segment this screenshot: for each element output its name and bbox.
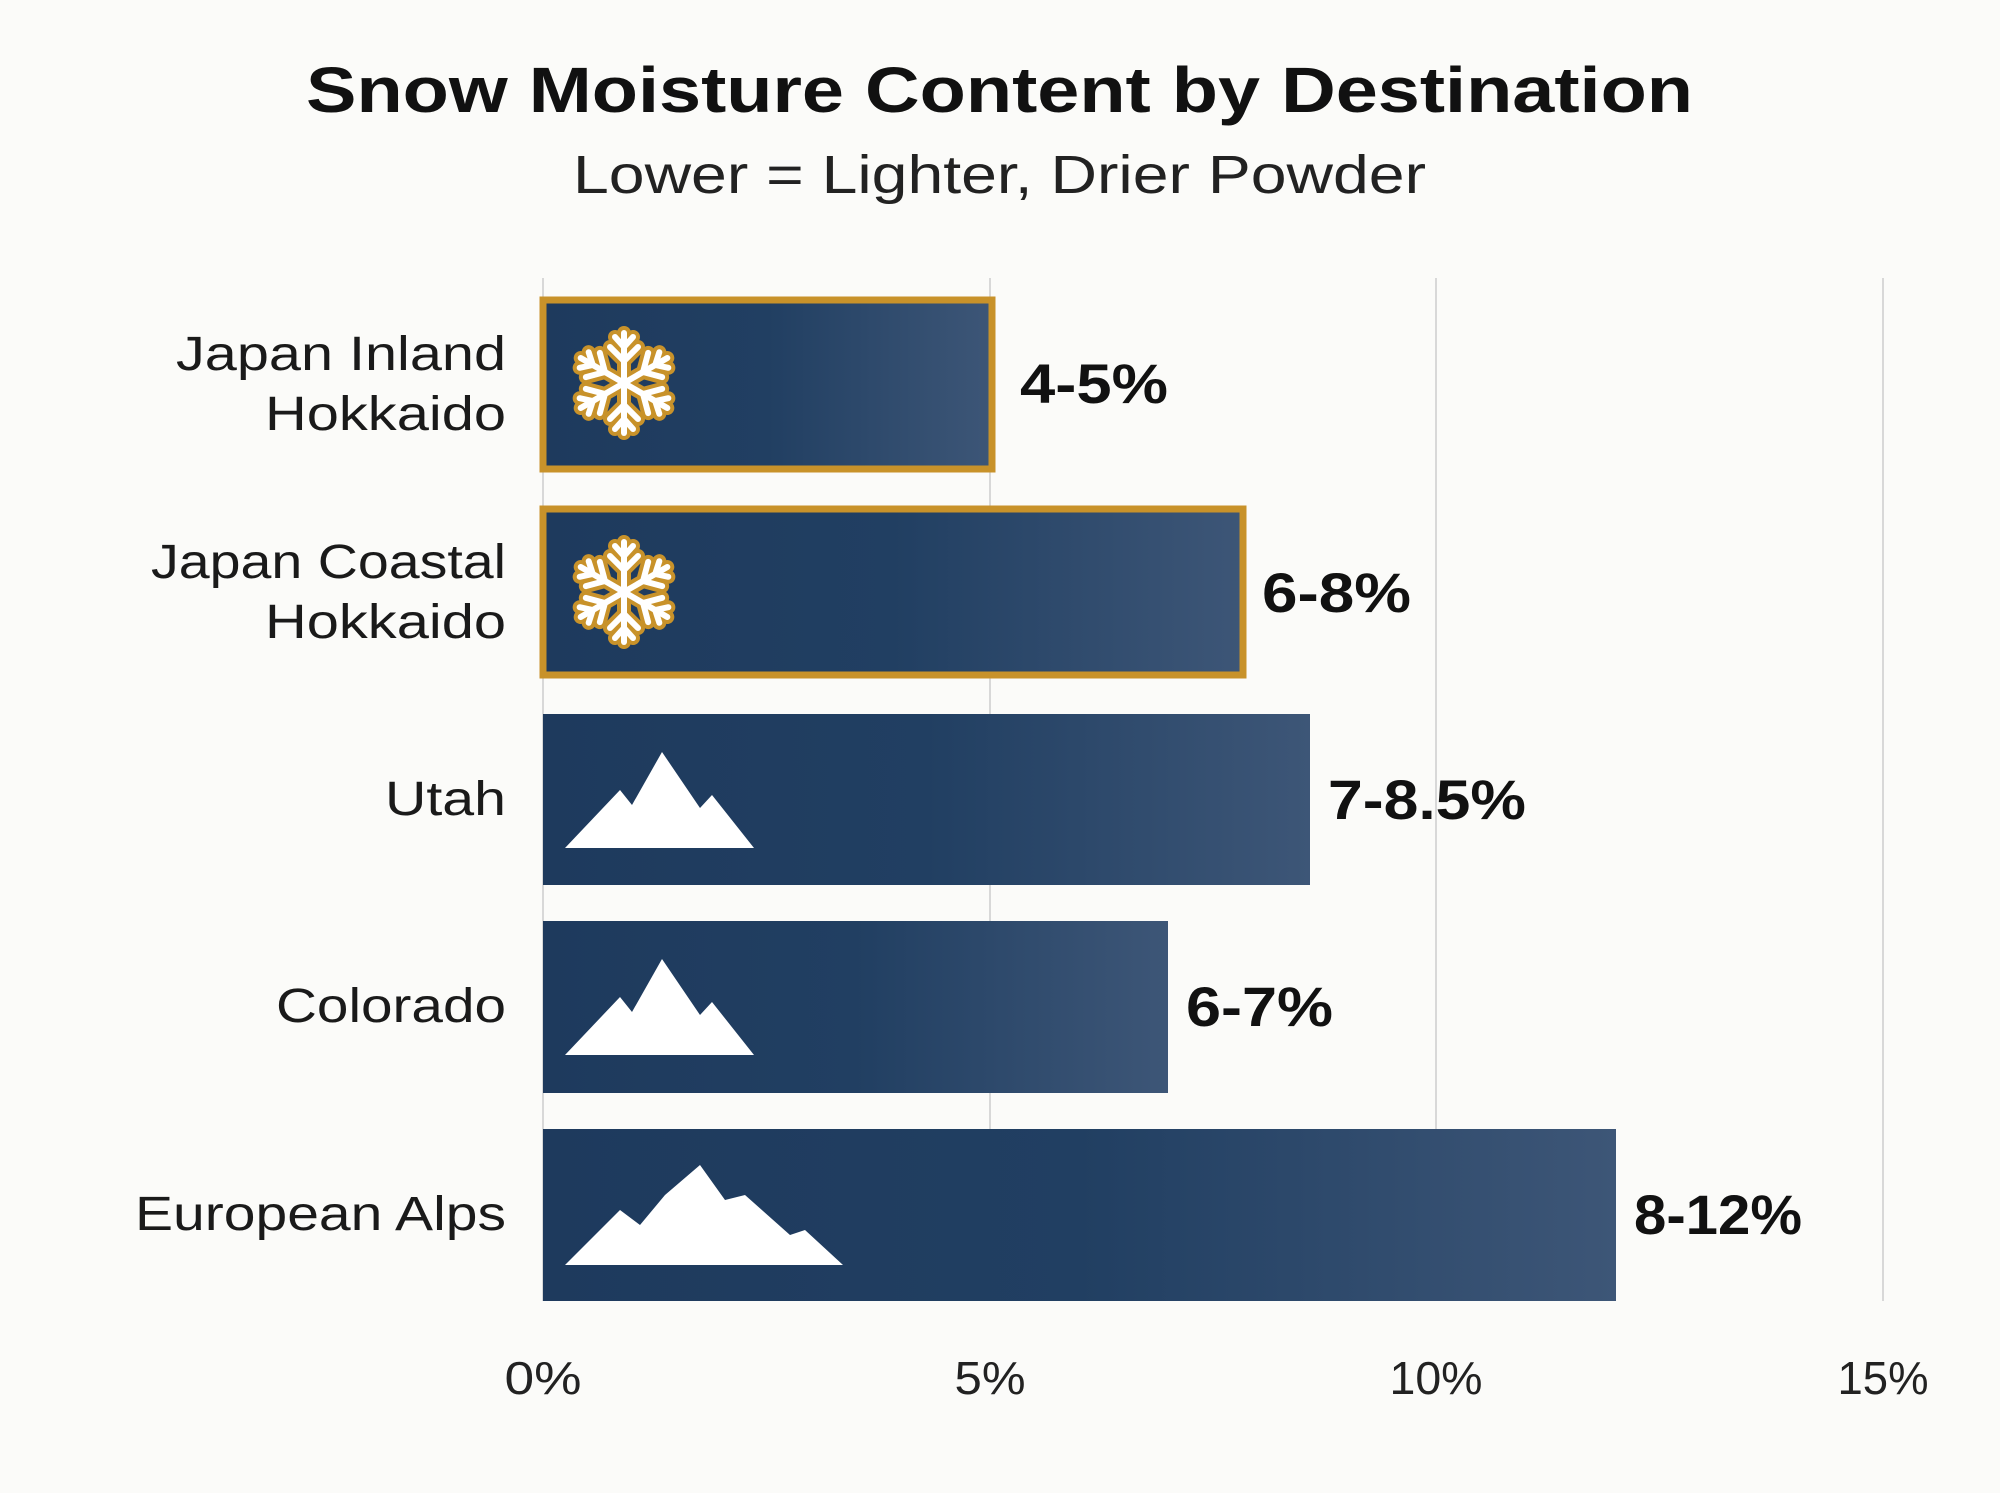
icon: snowflake bbox=[574, 333, 674, 433]
bar: Japan Inland bbox=[543, 300, 992, 469]
icon: mountains bbox=[565, 1165, 843, 1265]
icon: mountain bbox=[565, 959, 754, 1055]
value labels: 8-12% bbox=[1634, 1183, 1802, 1246]
category labels: Colorado bbox=[276, 980, 506, 1033]
x axis labels: 5% bbox=[954, 1352, 1026, 1404]
x axis labels: 0% bbox=[504, 1352, 582, 1404]
x axis labels: 10% bbox=[1390, 1352, 1482, 1404]
subtitle: Lower = Lighter, Drier Powder bbox=[573, 145, 1426, 205]
value labels: 4-5% bbox=[1020, 352, 1168, 415]
category labels: Hokkaido bbox=[265, 388, 506, 441]
category labels: Hokkaido bbox=[265, 596, 506, 649]
category labels: Japan Inland bbox=[176, 328, 506, 381]
value labels bbox=[1020, 352, 1802, 1246]
x axis labels bbox=[504, 1352, 1928, 1404]
icon: snowflake bbox=[574, 542, 674, 642]
icon: mountain bbox=[565, 752, 754, 848]
bar: Colorado bbox=[543, 921, 1168, 1093]
bar: Japan Coastal bbox=[543, 509, 1243, 675]
category labels: European Alps bbox=[135, 1188, 506, 1241]
value labels: 6-8% bbox=[1262, 561, 1411, 624]
x axis labels: 15% bbox=[1838, 1352, 1928, 1404]
value labels: 6-7% bbox=[1186, 975, 1333, 1038]
category labels: Utah bbox=[385, 773, 506, 826]
title: Snow Moisture Content by Destination bbox=[306, 54, 1693, 126]
category labels bbox=[135, 328, 506, 1241]
category labels: Japan Coastal bbox=[151, 536, 506, 589]
bar: Utah bbox=[543, 714, 1310, 885]
value labels: 7-8.5% bbox=[1328, 768, 1526, 831]
bar: European Alps bbox=[543, 1129, 1616, 1301]
